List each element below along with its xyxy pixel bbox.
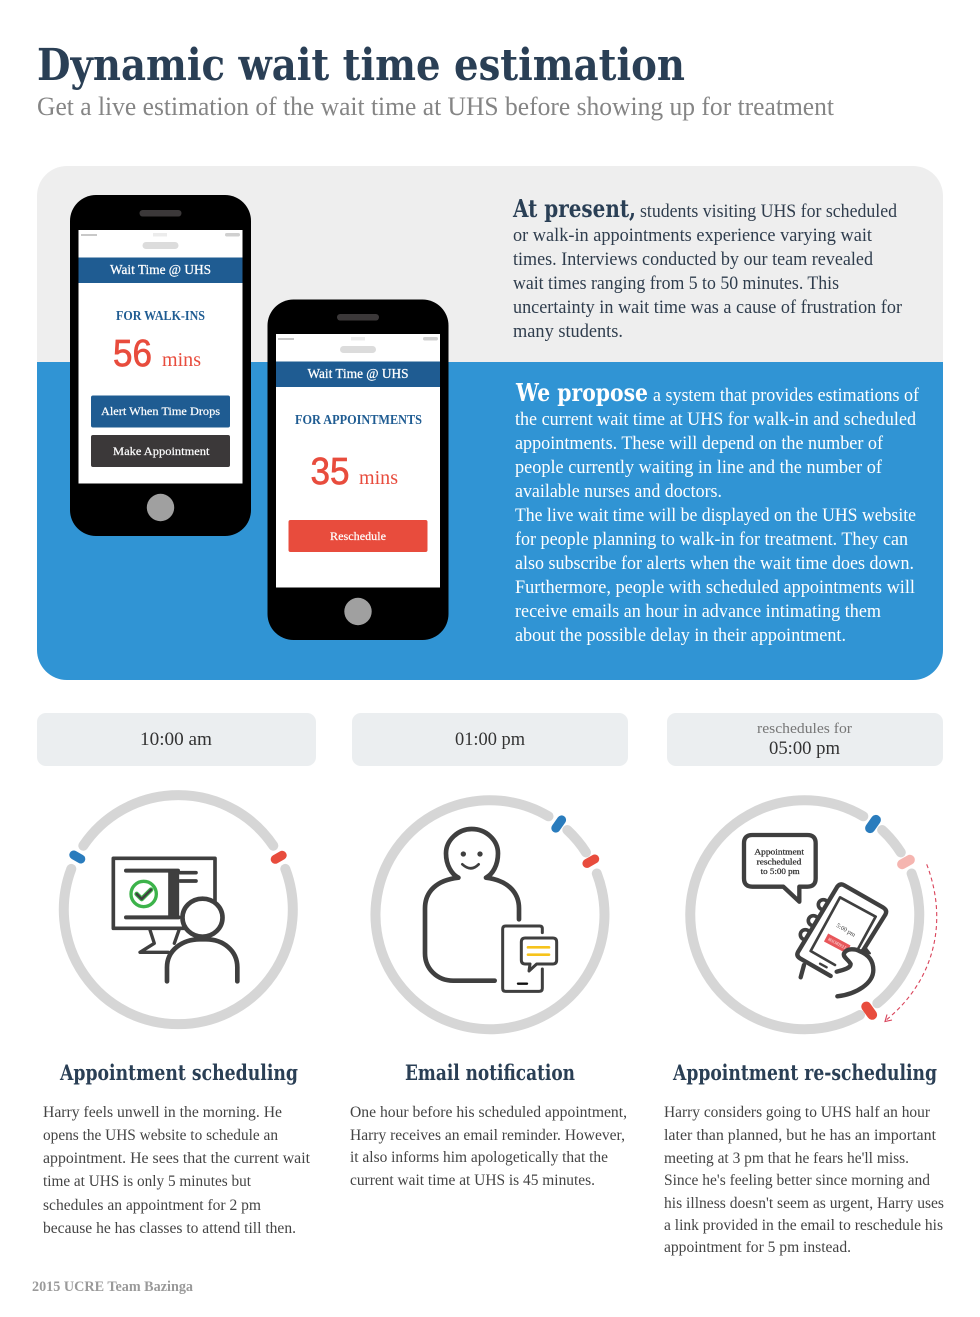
text block: scheduling story: because he has classes to attend till then. [43,1220,296,1237]
text block: at present: many students. [513,322,623,342]
text block: email story [350,1104,627,1189]
text block: re-scheduling story: meeting at 3 pm that he fears he'll miss. [664,1150,909,1167]
time box: 10:00 am: 10:00 am [140,729,212,750]
phone: walk-ins: Make Appointment [113,444,210,458]
text block: re-scheduling story: a link provided in the email to reschedule his [664,1217,943,1234]
text block: we propose: also subscribe for alerts when the wait time does down. [515,554,914,574]
icon: speech bubble: to 5:00 pm [761,867,800,876]
text block: scheduling story: Harry feels unwell in the morning. He [43,1104,282,1121]
icon: person at computer [113,858,237,981]
arrow: dashed reschedule arrow [885,864,937,1022]
text block: we propose: receive emails an hour in advance intimating them [515,602,882,622]
text block: we propose: for people planning to walk-in for treatment. They can [515,530,908,550]
text block: scheduling story [43,1104,311,1237]
time box: reschedules for 05:00 pm: 05:00 pm [769,738,840,759]
icon: appointment re-scheduling ring [690,800,919,1029]
heading: email notification: Email notification [405,1060,575,1085]
time box: reschedules for 05:00 pm: reschedules for [757,721,852,737]
text block: we propose: a system that provides estimations of [653,386,920,406]
text block: re-scheduling story: Harry considers going to UHS half an hour [664,1104,931,1121]
phone: appointments: mins [359,467,398,489]
subtitle: Get a live estimation of the wait time at UHS before showing up for treatment [37,92,835,121]
text block: we propose: appointments. These will depend on the number of [515,434,884,454]
phone: appointments [268,300,448,640]
text block: email story: it also informs him apologetically that the [350,1149,608,1166]
icon: person with phone message [425,829,557,991]
text block: we propose: The live wait time will be displayed on the UHS website [515,506,916,526]
icon: appointment scheduling ring [64,795,293,1024]
phone: walk-ins: Wait Time @ UHS [110,262,211,277]
text block: we propose: people currently waiting in line and the number of [515,458,883,478]
phone: walk-ins: Alert When Time Drops [101,404,220,418]
text block: email story: One hour before his scheduled appointment, [350,1104,627,1121]
text block: at present: times. Interviews conducted by our team revealed [513,250,874,270]
panel: present and proposal [37,166,943,680]
text block: scheduling story: schedules an appointment for 2 pm [43,1197,261,1214]
text block: email story: Harry receives an email reminder. However, [350,1127,625,1144]
icon: hand holding phone [797,884,886,996]
text block: re-scheduling story: his illness doesn't seem as urgent, Harry uses [664,1195,944,1212]
icon: hand holding phone: 5:00 pm [835,922,857,939]
text block: re-scheduling story: Since he's feeling better since morning and [664,1172,930,1189]
time box: 01:00 pm: 01:00 pm [455,729,525,750]
phone: appointments: Reschedule [330,529,386,543]
time box: 10:00 am [37,713,316,766]
text block: we propose: about the possible delay in their appointment. [515,626,846,646]
text block: at present: wait times ranging from 5 to 50 minutes. This [513,274,839,294]
phone: walk-ins: 56 [113,333,152,375]
icon: speech bubble: rescheduled [757,857,802,866]
phone: appointments: FOR APPOINTMENTS [295,412,422,427]
text block: re-scheduling story [664,1104,944,1256]
text block: at present: At present, [512,194,636,223]
text block: we propose: Furthermore, people with scheduled appointments will [515,578,915,598]
text block: scheduling story: appointment. He sees that the current wait [43,1150,311,1167]
icon: speech bubble: Appointment [754,847,805,856]
icon: hand holding phone: RESCHEDULE [827,937,847,950]
phone: walk-ins [70,195,251,536]
text block: at present: uncertainty in wait time was a cause of frustration for [513,298,902,318]
text block: re-scheduling story: appointment for 5 pm instead. [664,1239,851,1256]
text block: at present: or walk-in appointments experience varying wait [513,226,873,246]
text block: we propose: available nurses and doctors. [515,482,722,502]
phone: walk-ins: FOR WALK-INS [116,308,205,323]
text block: re-scheduling story: later than planned, but he has an important [664,1127,937,1144]
icon: email notification ring [375,800,604,1029]
phone: walk-ins: mins [162,349,201,371]
icon: speech bubble [744,835,816,902]
footer credit: 2015 UCRE Team Bazinga [32,1279,193,1295]
phone: appointments: 35 [310,451,350,493]
time box: 01:00 pm [352,713,628,766]
text block: at present [512,194,902,342]
heading: appointment scheduling: Appointment scheduling [59,1060,298,1085]
text block: scheduling story: opens the UHS website to schedule an [43,1127,278,1144]
text block: we propose [515,378,920,646]
title: Dynamic wait time estimation [37,40,685,91]
text block: email story: current wait time at UHS is 45 minutes. [350,1172,595,1189]
text block: at present: students visiting UHS for scheduled [640,202,898,222]
text block: we propose: the current wait time at UHS for walk-in and scheduled [515,410,917,430]
text block: we propose: We propose [515,378,648,407]
time box: reschedules for 05:00 pm [667,713,943,766]
text block: scheduling story: time at UHS is only 5 minutes but [43,1173,252,1190]
phone: appointments: Wait Time @ UHS [308,366,408,381]
